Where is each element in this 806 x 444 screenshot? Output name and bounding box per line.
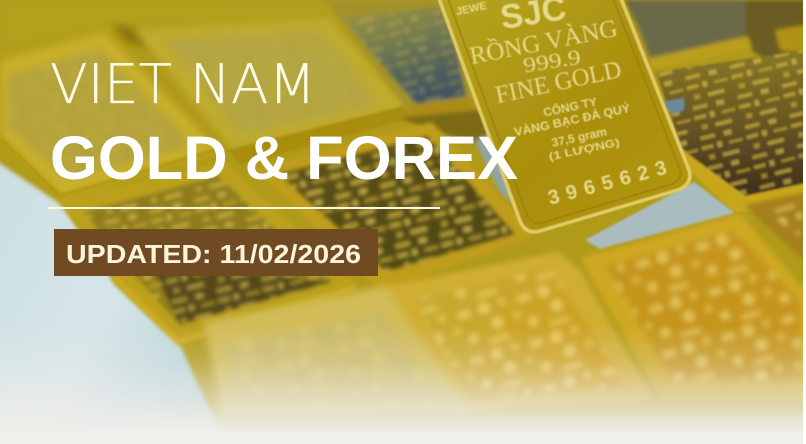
bar: centre dark bbox=[255, 122, 535, 292]
engraved text on bar: 3965623 bbox=[546, 157, 669, 210]
engraved text on bar: VÀNG BẠC ĐÁ QUÝ bbox=[513, 100, 631, 139]
bar: upper centre bbox=[135, 18, 408, 150]
engraved text on bar: CÔNG TY bbox=[542, 94, 598, 120]
engraved text on bar: FINE GOLD bbox=[493, 56, 624, 109]
bar: lower right bbox=[580, 214, 806, 400]
engraved text on bar: 37,5 gram bbox=[550, 124, 608, 150]
divider line bbox=[48, 207, 440, 209]
engraved text on bar: JEWE bbox=[455, 0, 488, 18]
pale blue table surface bbox=[0, 150, 225, 444]
white strip at right edge bbox=[803, 0, 806, 444]
bar: lower left blurred bbox=[204, 286, 470, 416]
date badge bbox=[54, 229, 378, 276]
engraved text on bar: RỒNG VÀNG bbox=[467, 13, 620, 70]
shadow notch between upper bars bbox=[112, 24, 150, 48]
bar: right dark bbox=[656, 50, 806, 212]
bar: upper dark blue bbox=[325, 0, 476, 124]
engraved text on bar bbox=[455, 0, 669, 210]
heading: Gold and Forex: GOLD & FOREX bbox=[50, 124, 518, 192]
main gold bar: SJC 999.9 fine gold bbox=[438, 0, 690, 232]
pale blue gap beside main bar bbox=[474, 125, 524, 212]
engraved text on bar: 999.9 bbox=[521, 45, 582, 77]
shadow behind centre bbox=[400, 110, 500, 150]
front edge of upper centre bar bbox=[228, 106, 412, 165]
bar: lower centre bbox=[378, 252, 655, 412]
engraved text on bar: (1 LƯỢNG) bbox=[548, 137, 621, 163]
front edge of upper left bar bbox=[0, 138, 215, 196]
foreground fade to white bbox=[0, 325, 806, 444]
bar: small right bbox=[745, 192, 806, 262]
top strip of blurred bars bbox=[0, 0, 340, 52]
bar: upper left bbox=[0, 32, 218, 197]
date text: UPDATED: 11/02/2026 bbox=[66, 239, 361, 269]
pale blue gap under main bar bbox=[585, 182, 735, 249]
bar: lower left dark bbox=[58, 162, 358, 345]
heading: Viet Nam: VIET NAM bbox=[50, 53, 316, 116]
bar: right top bbox=[625, 0, 806, 90]
